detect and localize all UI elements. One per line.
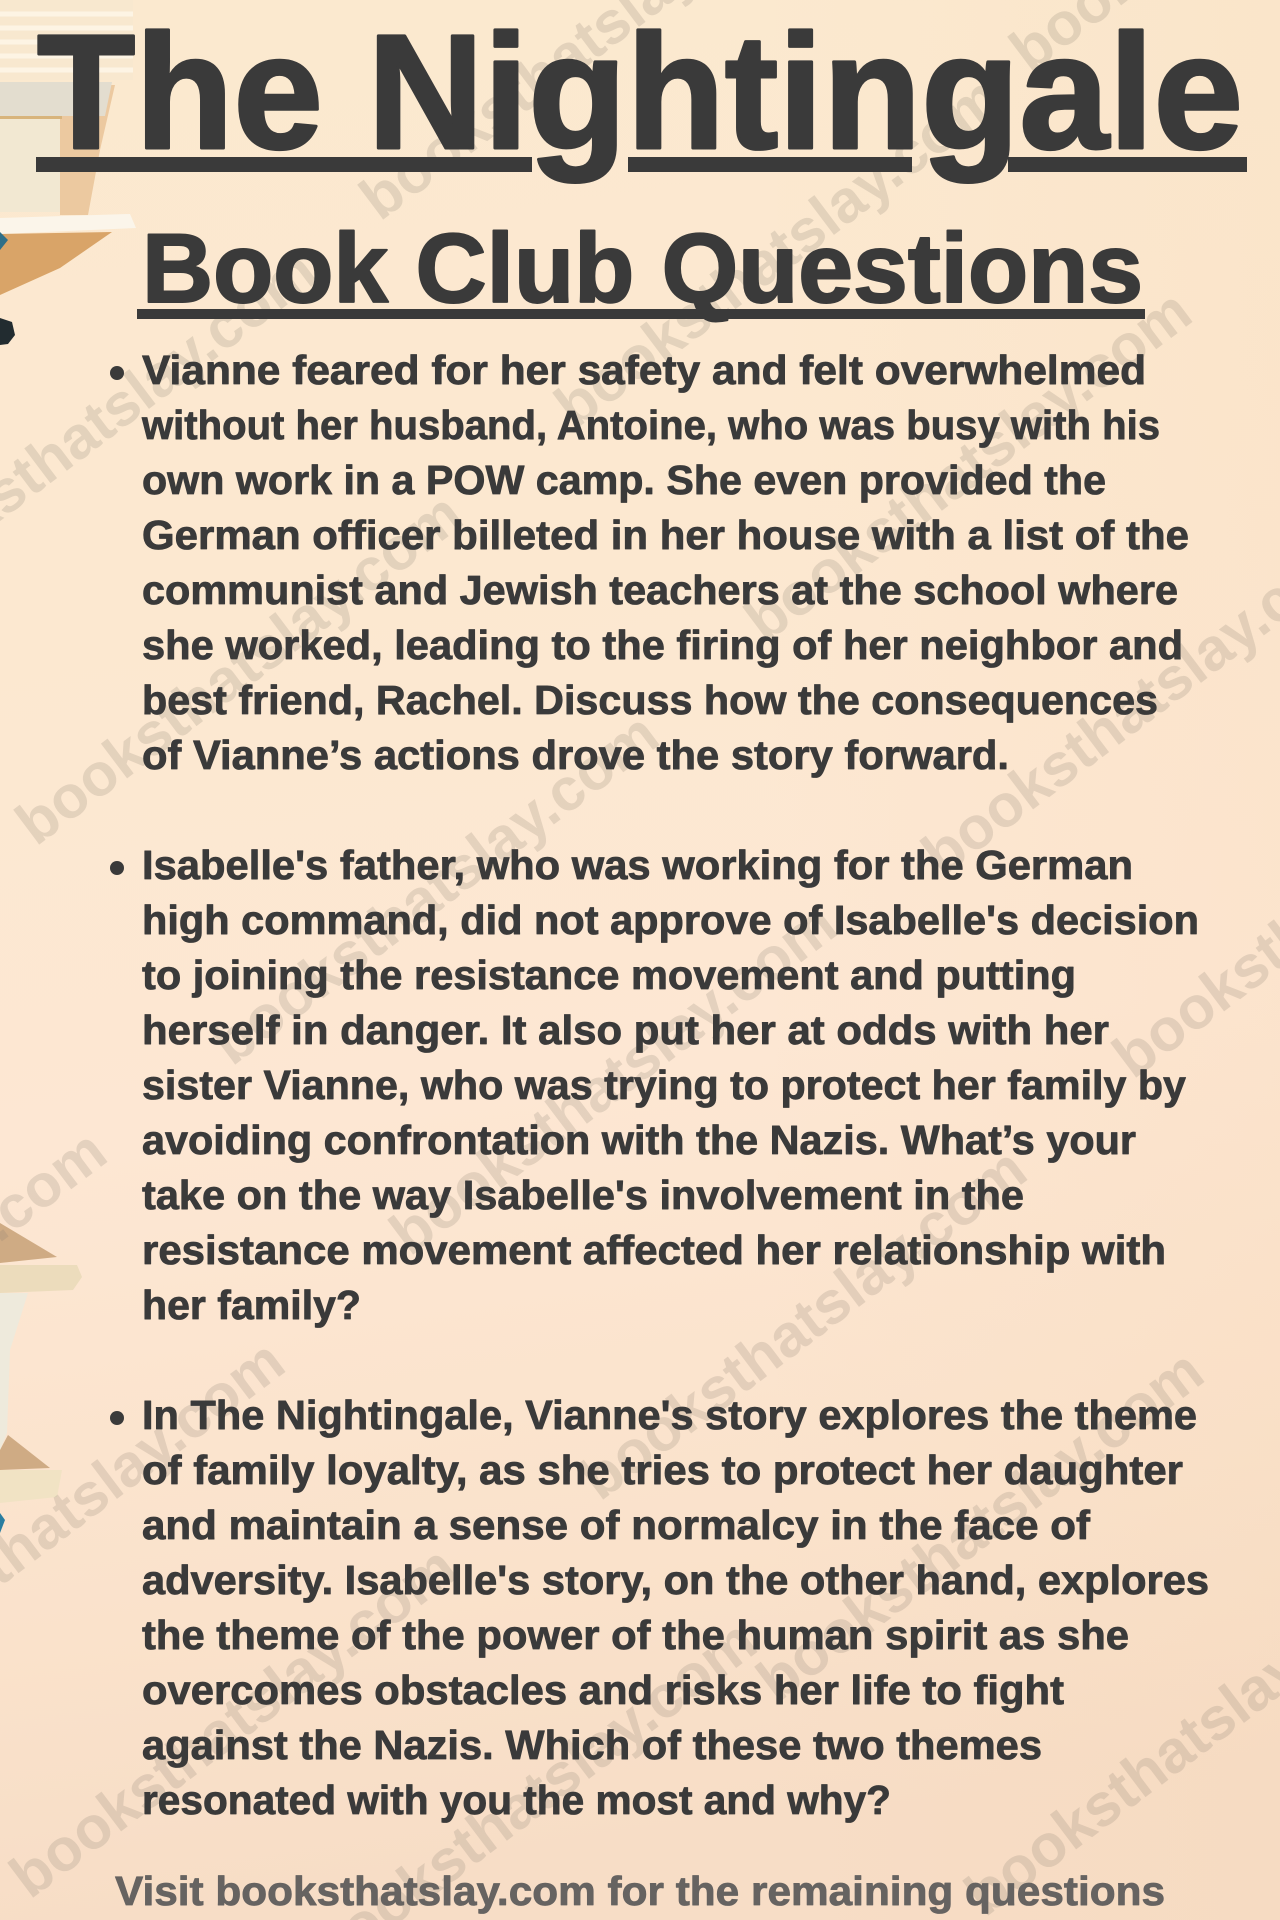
bullet 3 (110, 1411, 124, 1425)
question 1 (110, 347, 1189, 778)
question 1 text: best friend, Rachel. Discuss how the consequences (142, 677, 1158, 723)
watermarks: booksthatslay.com (733, 276, 1203, 654)
question 1 text: Vianne feared for her safety and felt overwhelmed (142, 347, 1146, 393)
question 2 text: resistance movement affected her relationship with (142, 1227, 1166, 1273)
title: The Nightingale (37, 0, 1243, 183)
question 2 text: to joining the resistance movement and putting (142, 952, 1076, 998)
question 2 text (142, 842, 1199, 1328)
question 2 text: high command, did not approve of Isabelle's decision (142, 897, 1199, 943)
watermarks: booksthatslay.com (745, 1336, 1215, 1714)
question 1 text: without her husband, Antoine, who was busy with his (141, 402, 1160, 448)
bullet 2 (110, 861, 124, 875)
question 1 text: communist and Jewish teachers at the school where (142, 567, 1178, 613)
question 2 text: sister Vianne, who was trying to protect her family by (142, 1062, 1186, 1108)
question 3 text: In The Nightingale, Vianne's story explores the theme (142, 1392, 1197, 1438)
question 2 text: Isabelle's father, who was working for the German (142, 842, 1133, 888)
question 3 text (142, 1392, 1209, 1823)
question 1 text: own work in a POW camp. She even provided the (142, 457, 1106, 503)
question 3 (110, 1392, 1209, 1823)
question 3 text: against the Nazis. Which of these two themes (142, 1722, 1042, 1768)
question 3 text: of family loyalty, as she tries to protect her daughter (142, 1447, 1183, 1493)
question 2 (110, 842, 1199, 1328)
question 3 text: adversity. Isabelle's story, on the other hand, explores (142, 1557, 1209, 1603)
watermarks: booksthatslay.com (4, 479, 474, 857)
question 1 text: German officer billeted in her house with a list of the (142, 512, 1189, 558)
question 2 text: take on the way Isabelle's involvement in the (142, 1172, 1024, 1218)
footer call to action: Visit booksthatslay.com for the remaining questions (115, 1868, 1165, 1914)
question 3 text: resonated with you the most and why? (142, 1777, 891, 1823)
question 1 text: of Vianne’s actions drove the story forward. (142, 732, 1009, 778)
question 3 text: the theme of the power of the human spirit as she (142, 1612, 1129, 1658)
watermarks: booksthatslay.com (0, 1532, 468, 1910)
watermarks: booksthatslay.com (378, 889, 848, 1267)
watermarks: booksthatslay.com (543, 62, 1013, 440)
question 3 text: overcomes obstacles and risks her life to fight (142, 1667, 1064, 1713)
question 2 text: her family? (142, 1282, 361, 1328)
decorative book stack, middle left (0, 1223, 82, 1533)
watermarks: booksthatslay.com (568, 1134, 1038, 1512)
question 3 text: and maintain a sense of normalcy in the face of (142, 1502, 1090, 1548)
question 1 text: she worked, leading to the firing of her neighbor and (142, 622, 1183, 668)
decorative book stack, top left (0, 0, 136, 345)
question 2 text: avoiding confrontation with the Nazis. What’s your (142, 1117, 1136, 1163)
watermarks: booksthatslay.com (200, 699, 670, 1077)
subtitle: Book Club Questions (142, 213, 1143, 323)
bullet 1 (110, 366, 124, 380)
question 1 text (141, 347, 1189, 778)
question 2 text: herself in danger. It also put her at odds with her (142, 1007, 1109, 1053)
